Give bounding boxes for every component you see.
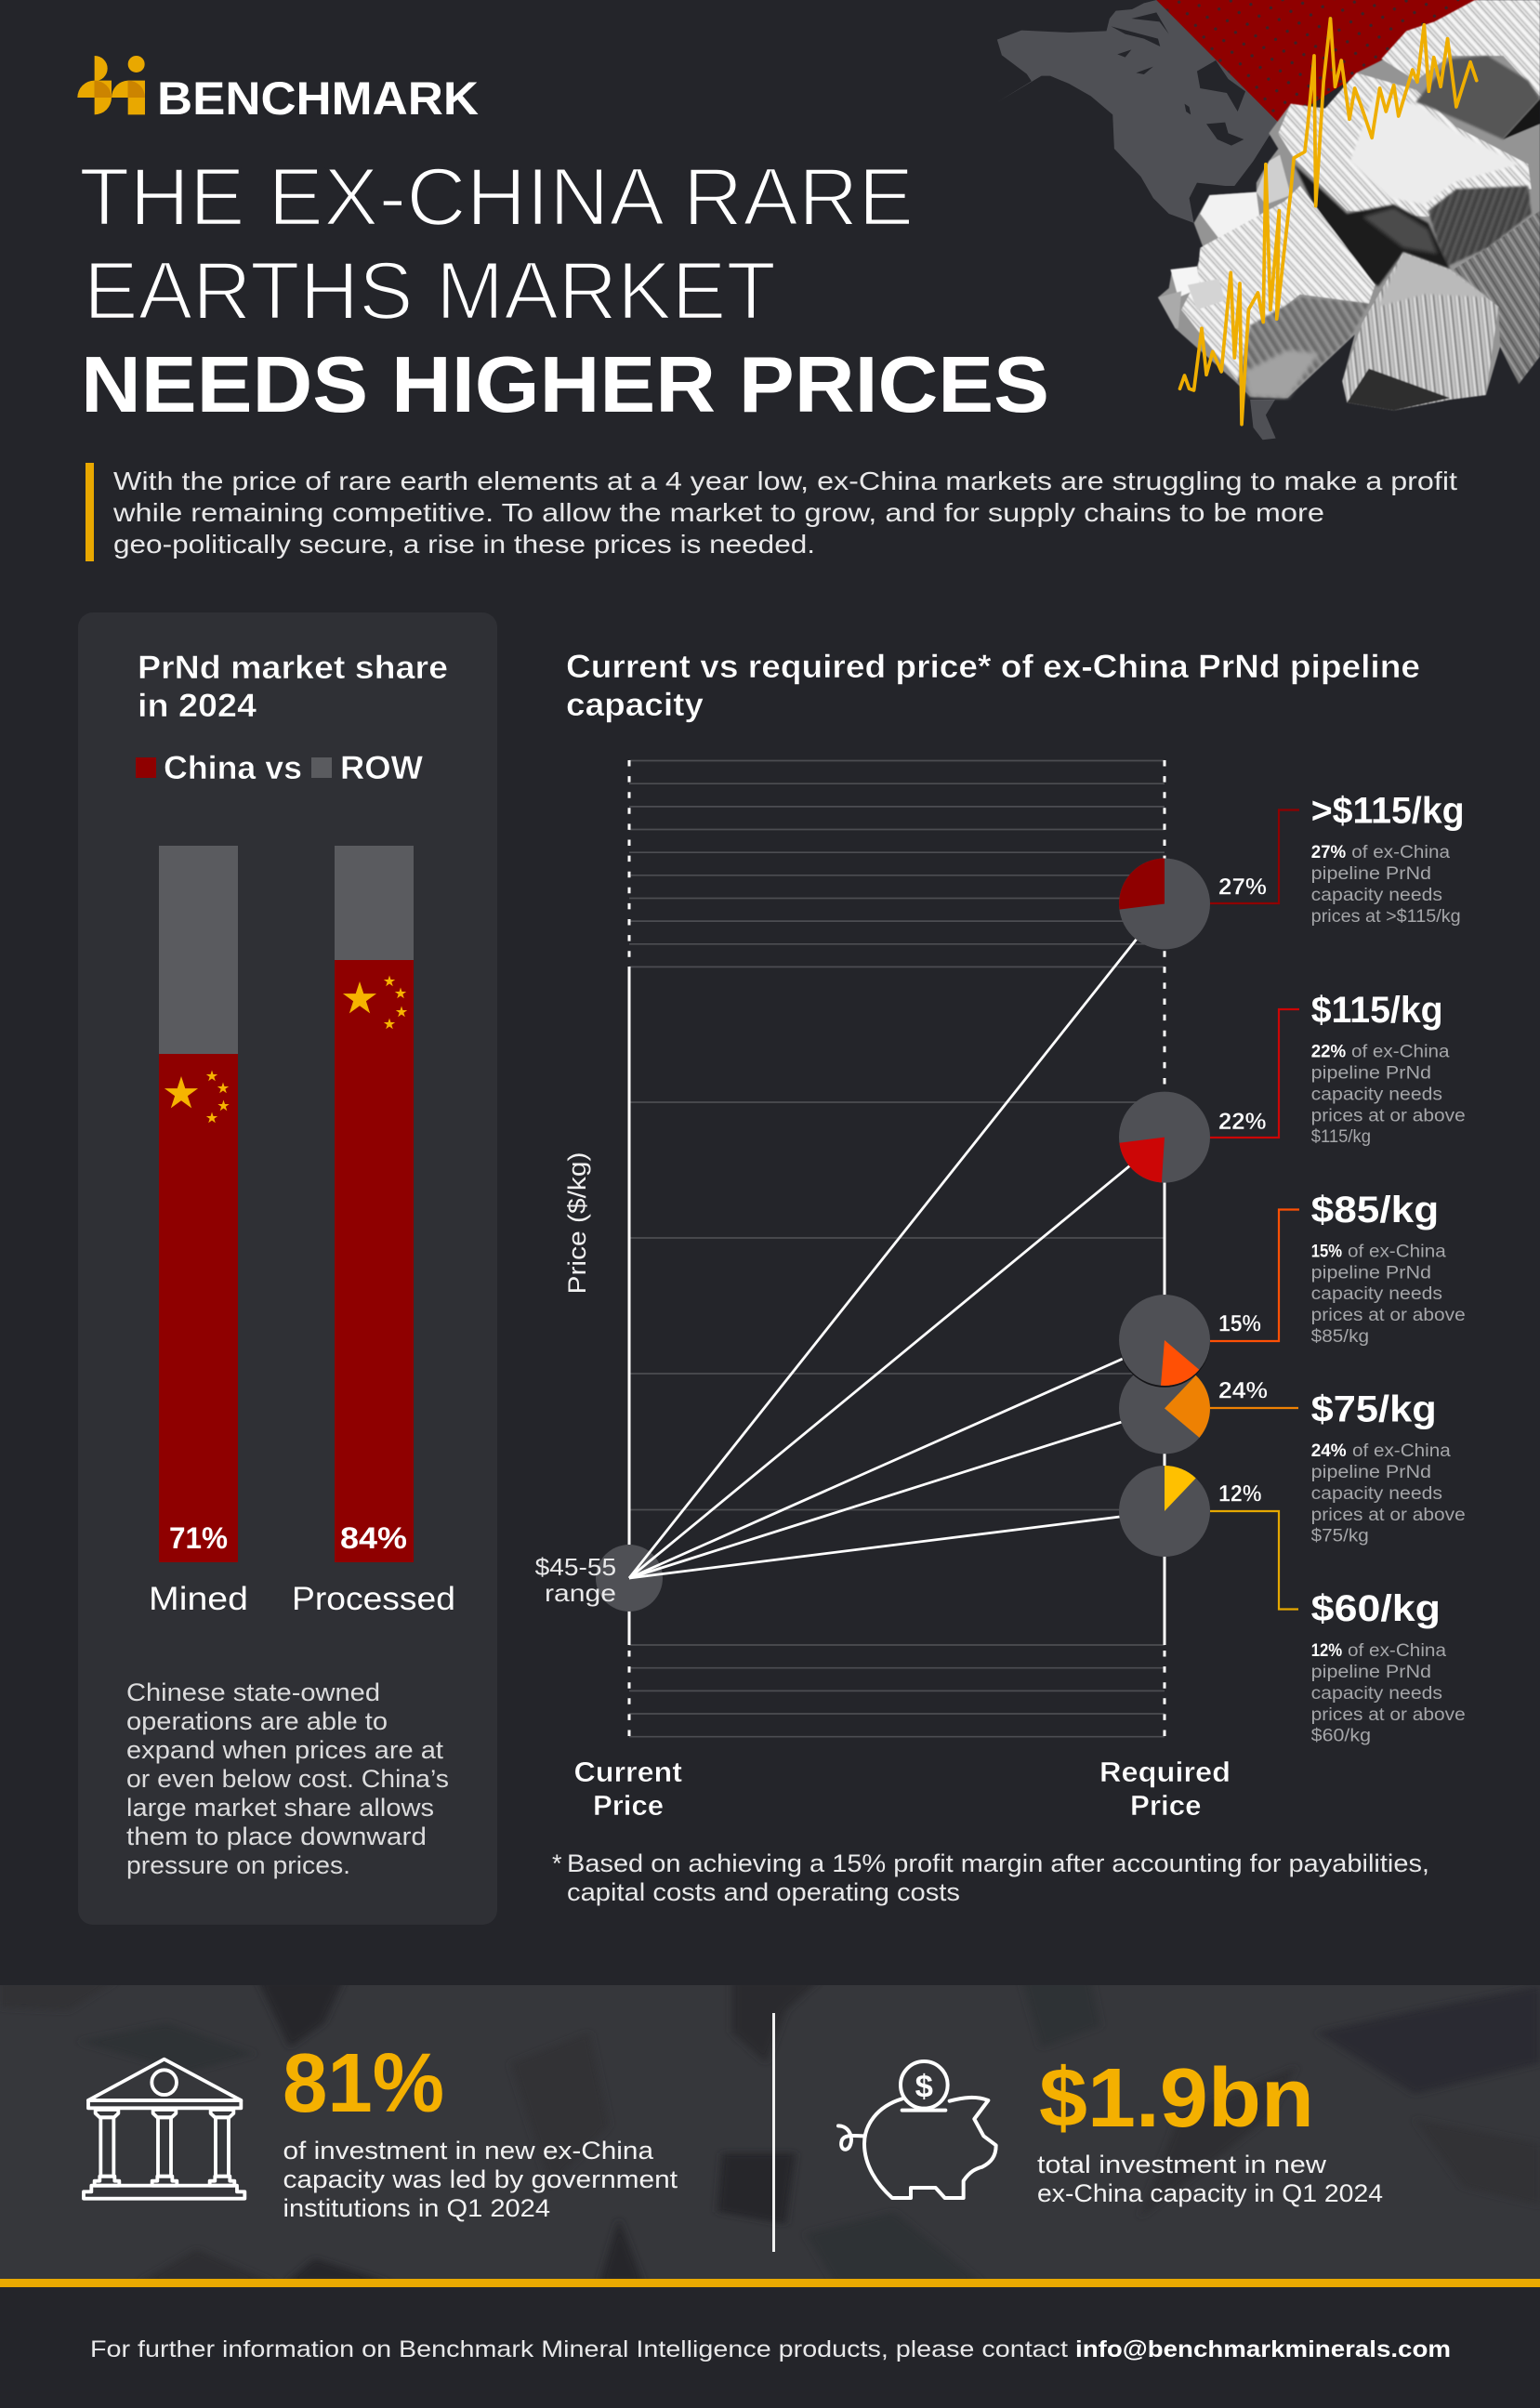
axis label: required price: Price [1130,1789,1201,1822]
pie percentage labels: 22% [1218,1109,1266,1135]
current price range circle [596,1545,663,1612]
callout: $115/kg: prices at or above [1311,1106,1466,1126]
panel paragraph: or even below cost. China’s [126,1765,449,1793]
axis label: required price: Required [1099,1756,1231,1788]
logo mark [77,56,145,114]
callout: $115/kg: of ex-China [1351,1043,1450,1061]
pie percentage labels: 24% [1218,1377,1268,1403]
grid lines [629,760,1165,1737]
bar: mined 71% [159,846,238,1562]
panel paragraph: expand when prices are at [126,1736,444,1764]
flag stars [343,976,407,1029]
axis: current price [628,760,630,1737]
logo [77,56,479,125]
intro text [112,467,1457,559]
axis label: current price: Price [593,1789,664,1822]
panel paragraph: large market share allows [126,1794,434,1822]
callout: $60/kg: capacity needs [1311,1684,1442,1704]
stat: 81%: institutions in Q1 2024 [283,2194,550,2222]
panel paragraph: Chinese state-owned [126,1678,380,1706]
price chart [535,760,1299,1822]
callout: $60/kg: $60/kg [1311,1727,1371,1746]
current price range label: range [545,1579,616,1607]
footer contact line: For further information on Benchmark Mineral Intelligence products, please contact [90,2336,1068,2362]
callout: >$115/kg: 27% [1311,843,1346,862]
axis label: required price [1099,1756,1231,1822]
pie percentage labels: 15% [1218,1310,1261,1336]
panel paragraph: pressure on prices. [126,1851,350,1879]
stat: $1.9bn [1037,2052,1383,2207]
panel paragraph: them to place downward [126,1822,427,1850]
callout: $60/kg: pipeline PrNd [1311,1663,1431,1682]
pie: 15% [1119,1295,1210,1388]
icon: piggy bank with coin: $ [915,2070,933,2105]
axis: required price [1164,760,1165,1737]
footnote: capital costs and operating costs [567,1878,960,1906]
callout: $115/kg: $115/kg [1311,990,1443,1031]
bar labels [149,1581,455,1617]
intro text: With the price of rare earth elements at a 4 year low, ex-China markets are struggling to make a profit [113,467,1457,495]
callout: $115/kg: 22% [1311,1043,1346,1061]
yellow price line [1179,19,1477,425]
intro accent bar [86,463,94,561]
bar labels: Mined [149,1581,248,1617]
callout: $85/kg: pipeline PrNd [1311,1263,1431,1283]
legend: China vs [164,750,302,786]
panel heading [138,650,448,724]
panel paragraph: operations are able to [126,1707,388,1735]
callout: $85/kg: $85/kg [1311,1327,1369,1347]
callout: >$115/kg: >$115/kg [1311,790,1465,831]
yellow rule [0,2279,1540,2287]
callout: $115/kg: capacity needs [1311,1086,1442,1104]
callout: $115/kg: $115/kg [1311,1127,1371,1147]
panel: PrNd market share [78,612,497,1925]
callout: $60/kg: prices at or above [1311,1705,1466,1725]
callout: >$115/kg: prices at >$115/kg [1311,907,1461,927]
bar: processed 84%: 84% [340,1521,407,1555]
panel heading: PrNd market share [138,650,448,686]
callout: $85/kg: of ex-China [1348,1242,1446,1262]
footnote: Based on achieving a 15% profit margin after accounting for payabilities, [567,1849,1429,1877]
footnote: * [552,1849,562,1877]
crystal rock cluster [1158,0,1540,411]
callout: $85/kg: $85/kg [1311,1190,1439,1230]
chart heading: capacity [566,687,704,723]
callout: $60/kg: 12% [1311,1641,1342,1661]
intro text: geo-politically secure, a rise in these prices is needed. [113,530,815,559]
map of the Americas [997,0,1282,440]
intro text: while remaining competitive. To allow the market to grow, and for supply chains to be more [112,498,1324,527]
chart heading: Current vs required price* of ex-China PrNd pipeline [566,649,1420,685]
bar: mined 71%: 71% [169,1521,228,1555]
flag stars [165,1071,230,1123]
bar labels: Processed [292,1581,455,1617]
pie: 22% [1119,1092,1210,1183]
title: NEEDS HIGHER PRICES [81,341,1049,429]
footer contact line: info@benchmarkminerals.com [1075,2336,1451,2362]
icon: government building [84,2059,244,2199]
footnote [552,1849,1429,1906]
hero image: map, red triangle, rare earth crystals and price line [997,0,1540,440]
y axis label: Price ($/kg) [563,1152,591,1294]
title: THE EX-CHINA RARE [79,151,914,243]
red triangle with dot pattern [1156,0,1478,124]
title [79,151,1049,429]
callout: $60/kg: $60/kg [1311,1588,1441,1629]
pie percentage labels: 27% [1218,874,1267,900]
callout: $85/kg: capacity needs [1311,1284,1442,1304]
callout: $75/kg: $75/kg [1311,1527,1369,1546]
panel heading: in 2024 [138,688,257,724]
callout: $85/kg: prices at or above [1311,1306,1466,1325]
axis label: current price [574,1756,682,1822]
icon: piggy bank with coin [838,2061,996,2198]
callout: $75/kg: prices at or above [1311,1506,1466,1525]
callout: >$115/kg [1311,790,1465,927]
callout connectors [1210,810,1299,1610]
pie: 27% [1119,859,1210,950]
callout: $75/kg: capacity needs [1311,1484,1442,1504]
stat: $1.9bn: $1.9bn [1039,2052,1314,2145]
logo wordmark: BENCHMARK [157,72,479,125]
callout: $85/kg: 15% [1311,1242,1342,1262]
stat: 81%: of investment in new ex-China [283,2137,654,2165]
callout: $75/kg: pipeline PrNd [1311,1463,1431,1482]
chart heading [566,649,1420,723]
stat: 81% [283,2037,678,2222]
legend: ROW [340,750,423,786]
pie percentage labels [1218,874,1268,1507]
stat: $1.9bn: ex-China capacity in Q1 2024 [1037,2179,1383,2207]
panel paragraph [126,1678,449,1879]
callout: $60/kg [1311,1588,1466,1746]
stat: 81%: capacity was led by government [283,2165,678,2193]
stats band with dark mineral texture [0,1980,1540,2283]
callout: >$115/kg: of ex-China [1351,843,1450,862]
callout: $115/kg: pipeline PrNd [1311,1063,1431,1084]
connector lines from current to required price [629,903,1165,1578]
axis label: current price: Current [574,1756,682,1788]
stats divider [772,2013,775,2252]
current price range label: $45-55 [535,1553,616,1581]
callout: $60/kg: of ex-China [1348,1641,1446,1661]
pie: 12% [1119,1466,1210,1557]
footer contact line [90,2336,1451,2362]
callout: $75/kg: of ex-China [1352,1441,1451,1461]
stat: $1.9bn: total investment in new [1037,2151,1327,2178]
bar: processed 84% [335,846,414,1562]
callout: $75/kg: $75/kg [1311,1389,1437,1430]
callout: >$115/kg: capacity needs [1311,886,1442,905]
callout: $75/kg: 24% [1311,1441,1347,1461]
title: EARTHS MARKET [84,244,776,336]
pie: 24% [1119,1362,1210,1454]
callout: $85/kg [1311,1190,1466,1347]
callout: $115/kg [1311,990,1466,1147]
callout: $75/kg [1311,1389,1466,1546]
pie percentage labels: 12% [1218,1481,1262,1507]
callout: >$115/kg: pipeline PrNd [1311,864,1431,884]
current price range label [535,1553,616,1607]
stat: 81%: 81% [283,2037,444,2130]
legend [136,750,423,786]
